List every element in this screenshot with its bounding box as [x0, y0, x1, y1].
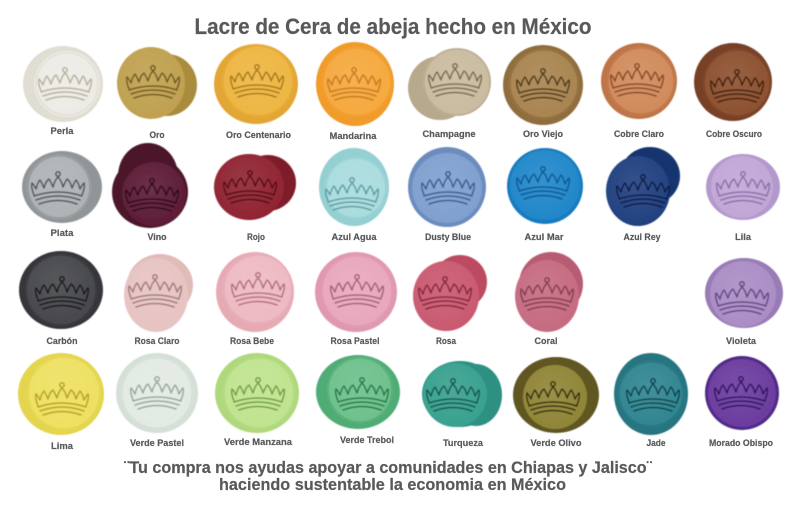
- label: Oro Centenario: [226, 130, 291, 141]
- seal: Verde Manzana: [215, 353, 299, 448]
- label: Champagne: [422, 129, 476, 140]
- seal: Lima: [18, 353, 104, 452]
- label: Coral: [534, 336, 558, 347]
- label: Verde Trebol: [340, 435, 394, 446]
- wax: [422, 361, 502, 427]
- wax: [606, 147, 680, 226]
- wax: [316, 355, 400, 429]
- seal: Azul Mar: [507, 148, 583, 243]
- seal: Morado Obispo: [705, 356, 779, 449]
- wax: [216, 252, 294, 332]
- seal: Plata: [22, 151, 102, 239]
- label: Rosa Bebe: [230, 336, 274, 347]
- seal: Rosa Pastel: [315, 252, 397, 347]
- label: Azul Agua: [332, 232, 377, 243]
- wax: [507, 148, 583, 224]
- seal: Azul Agua: [319, 148, 389, 243]
- wax: [316, 42, 394, 126]
- wax: [705, 356, 779, 430]
- label: Vino: [148, 232, 167, 243]
- wax: [214, 44, 298, 124]
- label: Rosa Pastel: [330, 336, 380, 347]
- label: Azul Mar: [524, 232, 564, 243]
- seal: Carbón: [19, 251, 103, 347]
- label: Rosa: [436, 336, 457, 347]
- label: Cobre Oscuro: [706, 129, 762, 140]
- label: Dusty Blue: [425, 232, 471, 243]
- label: Violeta: [726, 336, 757, 347]
- seal: Coral: [515, 252, 583, 347]
- seal: Verde Trebol: [316, 355, 400, 446]
- wax: [23, 46, 103, 122]
- seal: Vino: [112, 143, 188, 243]
- seal: Violeta: [705, 258, 783, 347]
- seal: Champagne: [408, 48, 491, 140]
- seal: Rosa Claro: [124, 254, 193, 347]
- footer quote: [124, 459, 652, 494]
- seal: Perla: [23, 46, 103, 137]
- seal: Oro: [117, 47, 197, 141]
- wax: [413, 255, 487, 331]
- seal: Verde Olivo: [513, 357, 599, 449]
- wax: [706, 154, 780, 220]
- label: Morado Obispo: [709, 438, 773, 449]
- seal: Rojo: [214, 154, 296, 243]
- wax: [315, 252, 397, 332]
- wax: [515, 252, 583, 332]
- seal: Verde Pastel: [116, 353, 198, 449]
- label: Perla: [50, 126, 74, 137]
- label: Jade: [646, 438, 666, 449]
- wax: [503, 45, 583, 125]
- wax: [117, 47, 197, 119]
- label: Oro Viejo: [523, 129, 563, 140]
- wax: [408, 48, 491, 120]
- label: Cobre Claro: [614, 129, 664, 140]
- seal: Dusty Blue: [408, 147, 486, 243]
- label: Verde Manzana: [224, 437, 293, 448]
- label: Rosa Claro: [134, 336, 180, 347]
- wax: [705, 258, 783, 328]
- seal: Oro Centenario: [214, 44, 298, 141]
- label: Oro: [150, 130, 165, 141]
- seal: Oro Viejo: [503, 45, 583, 140]
- label: Carbón: [46, 336, 78, 347]
- wax: [112, 143, 188, 228]
- label: Rojo: [247, 232, 265, 243]
- label: Turqueza: [443, 438, 484, 449]
- seal: Azul Rey: [606, 147, 680, 243]
- wax: [116, 353, 198, 433]
- seal: Cobre Oscuro: [694, 43, 772, 140]
- wax: [408, 147, 486, 227]
- label: Lima: [51, 441, 74, 452]
- wax: [215, 353, 299, 433]
- wax: [124, 254, 193, 332]
- quote line 1: ¨Tu compra nos ayudas apoyar a comunidades en Chiapas y Jalisco¨: [124, 459, 652, 477]
- wax: [22, 151, 102, 223]
- wax: [601, 43, 677, 119]
- wax: [513, 357, 599, 433]
- quote line 2: haciendo sustentable la economia en México: [219, 476, 566, 494]
- title: Lacre de Cera de abeja hecho en México: [194, 14, 592, 39]
- label: Mandarina: [330, 131, 377, 142]
- seal: Mandarina: [316, 42, 394, 142]
- wax: [319, 148, 389, 226]
- wax: [19, 251, 103, 329]
- seal: Rosa: [413, 255, 487, 347]
- seal: Jade: [614, 353, 688, 449]
- label: Verde Olivo: [530, 438, 582, 449]
- seal: Cobre Claro: [601, 43, 677, 140]
- label: Plata: [50, 228, 74, 239]
- label: Azul Rey: [624, 232, 661, 243]
- wax: [614, 353, 688, 435]
- wax: [694, 43, 772, 121]
- seal: Turqueza: [422, 361, 502, 449]
- seal: Rosa Bebe: [216, 252, 294, 347]
- seal: Lila: [706, 154, 780, 243]
- label: Verde Pastel: [130, 438, 184, 449]
- label: Lila: [735, 232, 752, 243]
- wax: [18, 353, 104, 435]
- wax: [214, 154, 296, 220]
